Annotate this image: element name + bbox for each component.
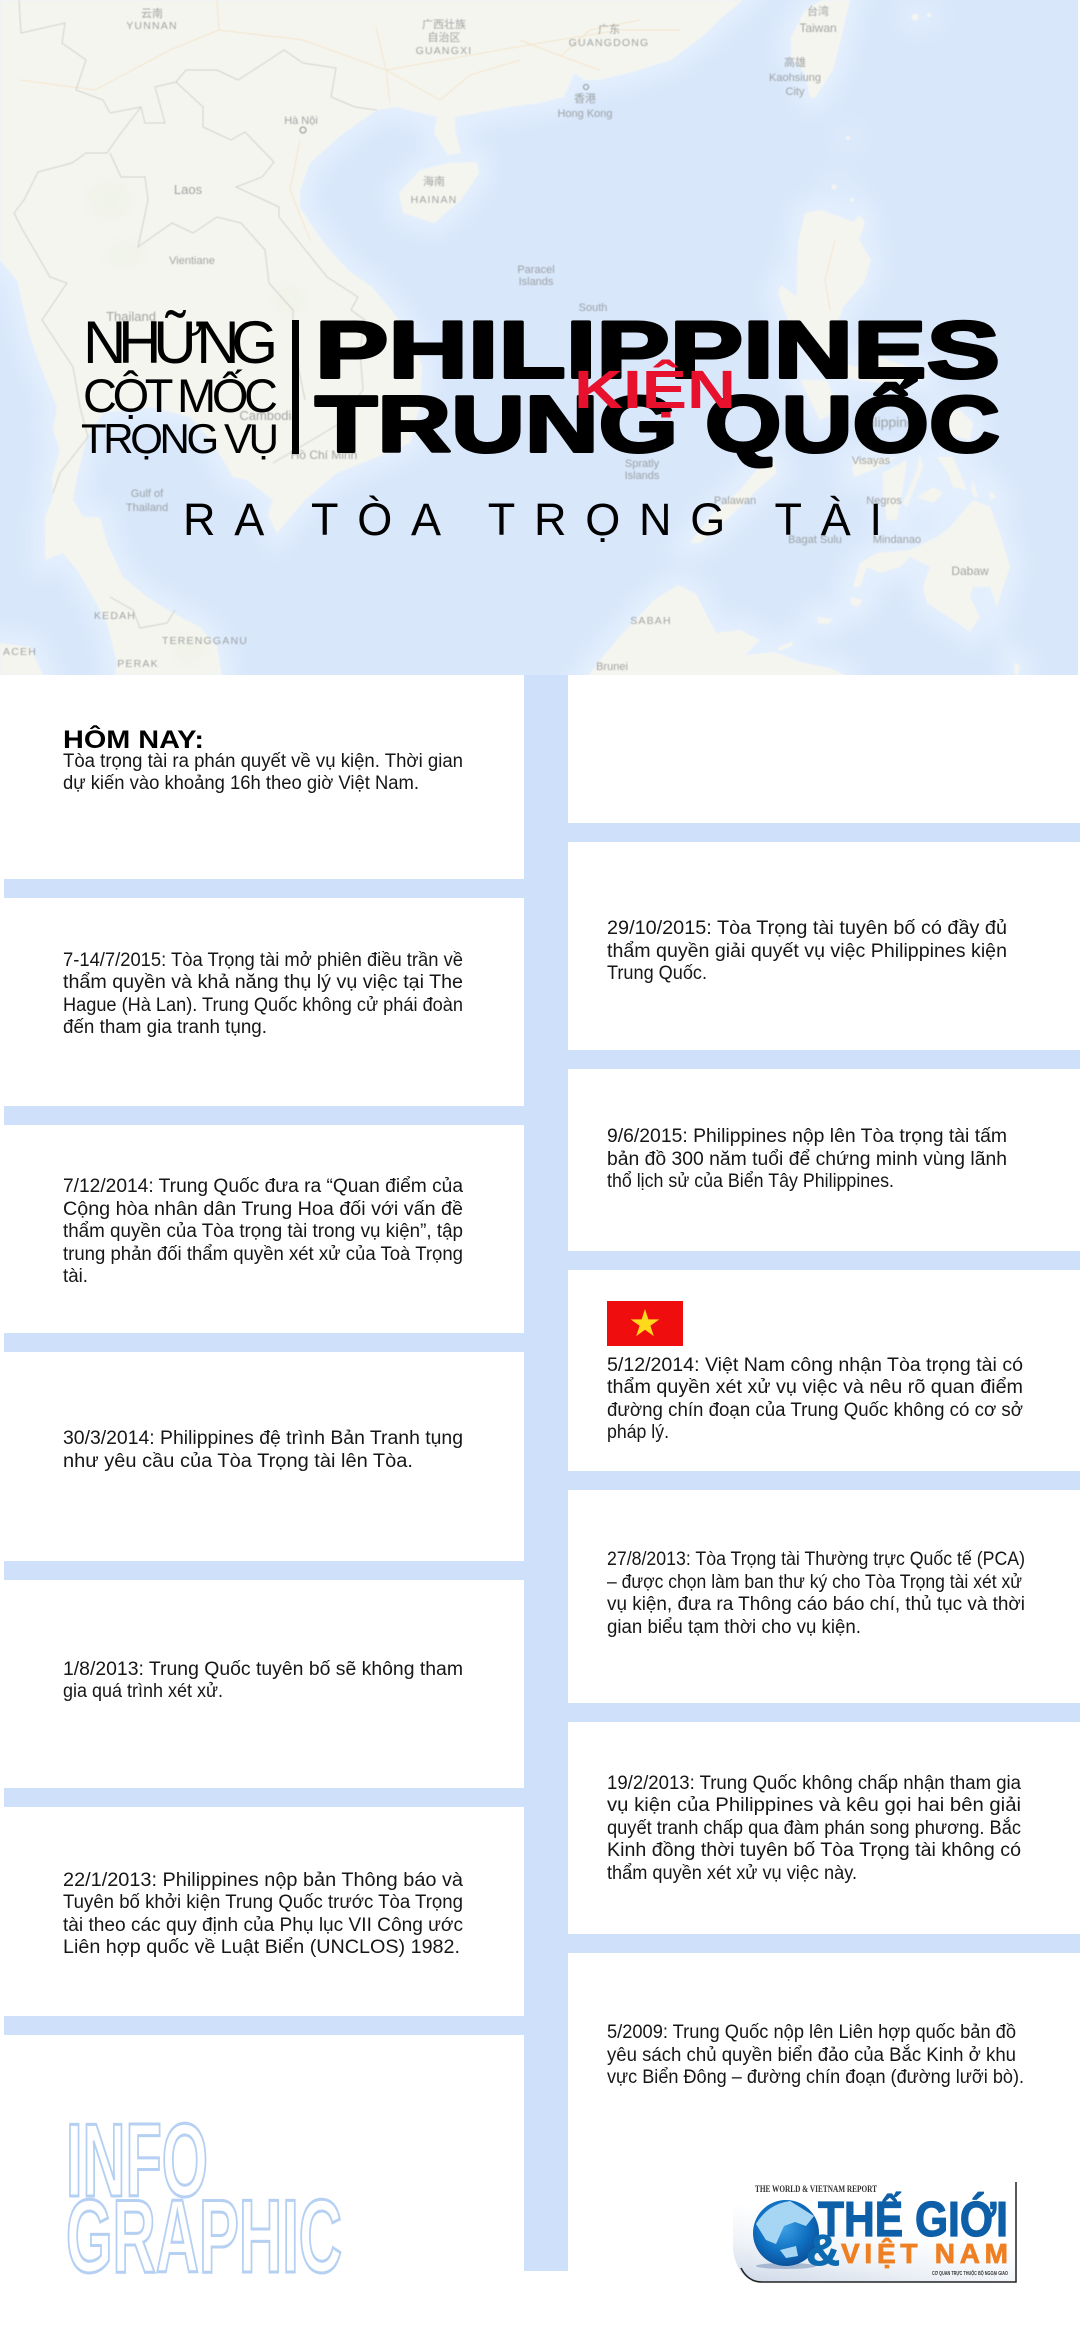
panel: 22/1/2013 xyxy=(63,1870,463,1958)
map place labels: SABAH xyxy=(630,615,672,627)
map place labels: Islands xyxy=(519,276,554,288)
map place labels: 海南 xyxy=(423,174,445,188)
logo: thế giới & việt nam: CƠ QUAN TRỰC THUỘC BỘ NGOẠI GIAO xyxy=(932,2269,1008,2277)
map place labels: Dabaw xyxy=(951,564,989,578)
panel: 19/2/2013: Kinh đồng thời tuyên bố Tòa Trọng tài không có xyxy=(607,1840,1021,1861)
map place labels: Cambodia xyxy=(239,408,299,423)
map place labels: 广东 xyxy=(598,23,620,36)
panel: 22/1/2013: tài theo các quy định của Phụ lục VII Công ước xyxy=(63,1915,463,1936)
panel: 19/2/2013: quyết tranh chấp qua đàm phán song phương. Bắc xyxy=(607,1817,1021,1839)
title: philippines kiện trung quốc: PHILIPPINES xyxy=(315,306,1000,396)
panel: 19/2/2013: vụ kiện của Philippines và kêu gọi hai bên giải xyxy=(607,1795,1021,1816)
panel: 7/12/2014: thẩm quyền của Tòa trọng tài trong vụ kiện”, tập xyxy=(63,1221,463,1242)
panel: 7-14/7/2015 xyxy=(63,950,463,1038)
panel: 27/8/2013 xyxy=(607,1549,1025,1638)
right column separators xyxy=(568,823,1080,1953)
outlined word mark: infographic: GRAPHIC xyxy=(66,2179,342,2295)
logo: thế giới & việt nam: & xyxy=(806,2226,840,2275)
logo: thế giới & việt nam xyxy=(733,2182,1016,2282)
panel: 19/2/2013: 19/2/2013: Trung Quốc không chấp nhận tham gia xyxy=(607,1773,1021,1794)
panel: 9/6/2015: 9/6/2015: Philippines nộp lên Tòa trọng tài tấm xyxy=(607,1126,1007,1147)
timeline white body xyxy=(0,675,1080,2349)
panel: 9/6/2015 xyxy=(607,1126,1007,1192)
panel: 27/8/2013: vụ kiện, đưa ra Thông cáo báo chí, thủ tục và thời xyxy=(607,1594,1025,1615)
panel: 27/8/2013: 27/8/2013: Tòa Trọng tài Thường trực Quốc tế (PCA) xyxy=(607,1549,1025,1570)
panel: 19/2/2013 xyxy=(607,1773,1021,1884)
panel: 7/12/2014: tài. xyxy=(63,1266,88,1287)
province roads xyxy=(20,0,835,310)
panel: 5/12/2014: pháp lý. xyxy=(607,1422,669,1443)
panel: 7-14/7/2015: đến tham gia tranh tụng. xyxy=(63,1017,267,1038)
panel: 30/3/2014: 30/3/2014: Philippines đệ trình Bản Tranh tụng xyxy=(63,1428,463,1449)
map place labels: Mindanao xyxy=(873,534,921,546)
map place labels: 自治区 xyxy=(428,30,460,44)
map place labels: Vientiane xyxy=(169,255,215,267)
panel: 27/8/2013: – được chọn làm ban thư ký cho Tòa Trọng tài xét xử xyxy=(607,1572,1022,1593)
logo: thế giới & việt nam: VIỆT NAM xyxy=(841,2238,1008,2269)
panel: 7-14/7/2015: Hague (Hà Lan). Trung Quốc không cử phái đoàn xyxy=(63,995,463,1016)
map place labels xyxy=(3,4,989,673)
green terrain patches xyxy=(88,180,306,664)
map place labels: Spratly xyxy=(625,458,660,470)
title: philippines kiện trung quốc: KIỆN xyxy=(574,359,736,420)
panel: 22/1/2013: Tuyên bố khởi kiện Trung Quốc trước Tòa Trọng xyxy=(63,1892,463,1913)
panel: 5/12/2014: thẩm quyền xét xử vụ việc và nêu rõ quan điểm xyxy=(607,1377,1023,1398)
map place labels: South xyxy=(579,302,607,314)
panel: 7-14/7/2015: 7-14/7/2015: Tòa Trọng tài mở phiên điều trần về xyxy=(63,950,463,971)
map place labels: Hong Kong xyxy=(557,108,613,120)
title: những cột mốc trong vụ xyxy=(81,309,279,462)
map place labels: Hồ Chí Minh xyxy=(291,448,357,462)
icon: globe xyxy=(753,2200,819,2269)
panel: hôm nay xyxy=(63,724,463,794)
panel: hôm nay: dự kiến vào khoảng 16h theo giờ Việt Nam. xyxy=(63,773,419,794)
panel: 29/10/2015 xyxy=(607,918,1007,984)
map place labels: 香港 xyxy=(574,92,596,105)
panel: 29/10/2015: 29/10/2015: Tòa Trọng tài tuyên bố có đầy đủ xyxy=(607,918,1007,939)
map place labels: Visayas xyxy=(852,455,891,467)
panel: 7/12/2014 xyxy=(63,1176,463,1287)
map place labels: 广西壮族 xyxy=(422,17,466,31)
map place labels: Kaohsiung xyxy=(769,72,821,84)
map place labels: Philippines xyxy=(854,414,922,430)
background map of the South China Sea region xyxy=(0,0,1078,680)
title divider xyxy=(292,320,299,454)
timeline central vertical bar xyxy=(524,675,568,2271)
map place labels: Gulf of xyxy=(131,488,164,500)
panel: 1/8/2013 xyxy=(63,1659,463,1702)
panel: 7/12/2014: Cộng hòa nhân dân Trung Hoa đối với vấn đề xyxy=(63,1199,463,1220)
map place labels: PERAK xyxy=(117,658,159,670)
map place labels: Thailand xyxy=(106,309,156,324)
logo: thế giới & việt nam: THẾ GIỚI xyxy=(818,2192,1008,2247)
map place labels: Hà Nội xyxy=(284,115,318,127)
map place labels: Laos xyxy=(174,182,203,197)
outlined word mark: infographic xyxy=(66,2103,342,2295)
panel: 30/3/2014: như yêu cầu của Tòa Trọng tài lên Tòa. xyxy=(63,1451,413,1472)
map place labels: 高雄 xyxy=(784,55,806,69)
outlined word mark: infographic: INFO xyxy=(66,2103,208,2219)
panel: 1/8/2013: 1/8/2013: Trung Quốc tuyên bố sẽ không tham xyxy=(63,1659,463,1680)
map place labels: Thailand xyxy=(126,502,168,514)
panel: 9/6/2015: thổ lịch sử của Biển Tây Philippines. xyxy=(607,1171,894,1192)
panel: 7/12/2014: 7/12/2014: Trung Quốc đưa ra “Quan điểm của xyxy=(63,1176,463,1197)
map place labels: City xyxy=(786,86,805,98)
panel: 27/8/2013: gian biểu tạm thời cho vụ kiện. xyxy=(607,1617,861,1638)
panel: 5/12/2014: đường chín đoạn của Trung Quốc không có cơ sở xyxy=(607,1400,1023,1421)
map place labels: Bagat Sulu xyxy=(788,534,842,546)
panel: 19/2/2013: thẩm quyền xét xử vụ việc này. xyxy=(607,1863,857,1884)
icon: vietnam flag xyxy=(607,1301,683,1346)
panel: 5/12/2014 xyxy=(607,1355,1023,1443)
title: philippines kiện trung quốc xyxy=(315,306,1000,468)
map place labels: TERENGGANU xyxy=(162,635,248,647)
logo: thế giới & việt nam: THE WORLD & VIETNAM REPORT xyxy=(755,2185,877,2195)
left column separators xyxy=(4,879,524,2035)
panel: 5/12/2014: 5/12/2014: Việt Nam công nhận Tòa trọng tài có xyxy=(607,1355,1023,1376)
map place labels: GUANGDONG xyxy=(569,37,649,49)
panel: 7/12/2014: trung phản đối thẩm quyền xét xử của Toà Trọng xyxy=(63,1244,463,1265)
panel: hôm nay: Tòa trọng tài ra phán quyết về vụ kiện. Thời gian xyxy=(63,751,463,772)
panel: 5/2009: 5/2009: Trung Quốc nộp lên Liên hợp quốc bản đồ xyxy=(607,2022,1016,2043)
map place labels: 云南 xyxy=(141,7,163,20)
panel: 22/1/2013: 22/1/2013: Philippines nộp bản Thông báo và xyxy=(63,1870,463,1891)
map place labels: GUANGXI xyxy=(416,45,472,57)
map place labels: ACEH xyxy=(3,646,37,658)
map place labels: YUNNAN xyxy=(126,20,178,32)
panel: 5/2009: yêu sách chủ quyền biển đảo của Bắc Kinh ở khu xyxy=(607,2044,1016,2066)
subtitle: ra tòa trọng tài: RA TÒA TRỌNG TÀI xyxy=(183,494,882,545)
map place labels: Brunei xyxy=(596,661,628,673)
panel: 22/1/2013: Liên hợp quốc về Luật Biển (UNCLOS) 1982. xyxy=(63,1937,460,1958)
map place labels: HAINAN xyxy=(411,194,457,206)
panel: 5/2009 xyxy=(607,2022,1024,2088)
map place labels: Islands xyxy=(625,470,660,482)
map place labels: 台湾 xyxy=(807,4,829,18)
panel: hôm nay: HÔM NAY: xyxy=(63,724,204,754)
title: philippines kiện trung quốc: QUỐC xyxy=(705,380,1000,468)
country borders xyxy=(14,0,377,628)
map place labels: Palawan xyxy=(714,495,756,507)
title: những cột mốc trong vụ: CỘT MỐC xyxy=(83,369,278,422)
map place labels: Paracel xyxy=(517,264,555,276)
map place labels: KEDAH xyxy=(94,610,136,622)
title: philippines kiện trung quốc: TRUNG xyxy=(315,380,678,468)
title: những cột mốc trong vụ: NHỮNG xyxy=(83,309,278,376)
panel: 29/10/2015: thẩm quyền giải quyết vụ việc Philippines kiện xyxy=(607,941,1007,962)
map place labels: Taiwan xyxy=(799,21,837,35)
panel: 30/3/2014 xyxy=(63,1428,463,1472)
panel: 7-14/7/2015: thẩm quyền và khả năng thụ lý vụ việc tại The xyxy=(63,972,463,993)
title: những cột mốc trong vụ: TRỌNG VỤ xyxy=(81,415,279,462)
panel: 1/8/2013: gia quá trình xét xử. xyxy=(63,1681,223,1702)
map place labels: Negros xyxy=(866,495,902,507)
panel: 9/6/2015: bản đồ 300 năm tuổi để chứng minh vùng lãnh xyxy=(607,1149,1007,1170)
panel: 29/10/2015: Trung Quốc. xyxy=(607,963,707,984)
panel: 5/2009: vực Biển Đông – đường chín đoạn (đường lưỡi bò). xyxy=(607,2067,1024,2088)
